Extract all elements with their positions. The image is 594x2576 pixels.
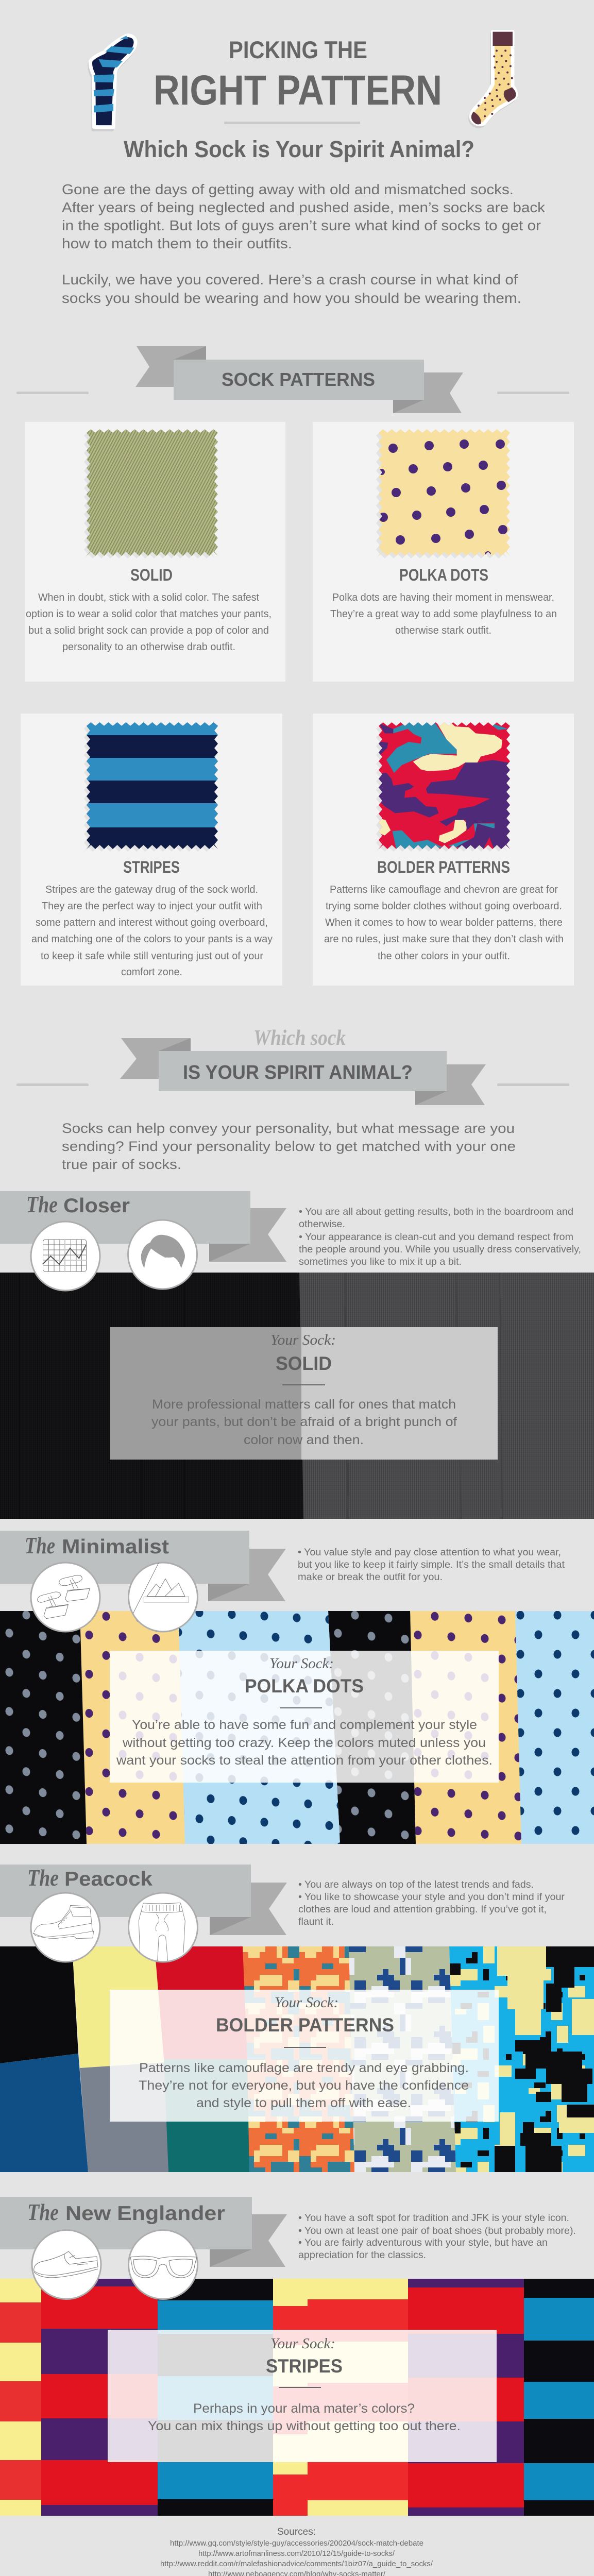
icon: glasses <box>129 2230 198 2299</box>
icon: pocket square <box>129 1563 198 1632</box>
overlay card: bolder patterns: Your Sock: <box>275 1994 338 2011</box>
panel: bolder patterns: trying some bolder clothes without going overboard. <box>326 901 562 912</box>
overlay card: solid <box>110 1327 498 1460</box>
ribbon <box>0 1865 287 1935</box>
intro text <box>62 181 546 306</box>
traits list: • You are all about getting results, both in the boardroom and <box>299 1207 573 1217</box>
panel: bolder patterns: the other colors in your outfit. <box>378 951 510 962</box>
subtitle: Which Sock is Your Spirit Animal? <box>124 136 474 162</box>
traits list: • You like to showcase your style and you don’t mind if your <box>298 1892 565 1903</box>
overlay card: polka dots <box>110 1651 499 1783</box>
sources: http://www.artofmanliness.com/2010/12/15/guide-to-socks/ <box>198 2549 395 2558</box>
sources: http://www.gq.com/style/style-guy/accessories/200204/sock-match-debate <box>170 2539 423 2548</box>
spirit animal intro text: sending? Find your personality below to get matched with your one <box>62 1139 516 1154</box>
panel: stripes <box>21 714 282 986</box>
overlay card: stripes: Your Sock: <box>270 2335 335 2352</box>
overlay card: polka dots: want your socks to steal the attention from your other clothes. <box>116 1753 493 1768</box>
panel: bolder patterns: are no rules, just make sure that they don’t clash with <box>324 934 564 945</box>
traits list: • You are always on top of the latest trends and fads. <box>298 1879 534 1890</box>
overlay card: solid: SOLID <box>276 1353 332 1374</box>
traits list: flaunt it. <box>298 1917 334 1927</box>
overlay card: bolder patterns <box>110 1990 499 2122</box>
ribbon heading: is your spirit animal: Which sock <box>253 1026 346 1050</box>
panel: bolder patterns: When it comes to how to wear bolder patterns, there <box>325 917 563 928</box>
ribbon: Minimalist <box>62 1536 169 1558</box>
overlay card: stripes: Perhaps in your alma mater’s colors? <box>193 2401 415 2416</box>
panel: solid: option is to wear a solid color that matches your pants, <box>26 608 271 620</box>
panel: stripes: Stripes are the gateway drug of the sock world. <box>45 884 258 895</box>
icon: boot <box>31 1893 100 1962</box>
traits list: • You value style and pay close attention to what you wear, <box>298 1547 561 1558</box>
ribbon heading: is your spirit animal: IS YOUR SPIRIT ANIMAL? <box>183 1062 413 1083</box>
overlay card: polka dots: You’re able to have some fun and complement your style <box>132 1718 477 1732</box>
overlay card: bolder patterns: They’re not for everyone, but you have the confidence <box>139 2078 469 2093</box>
traits list <box>298 1879 565 1927</box>
panel: solid <box>25 422 285 682</box>
ribbon: The <box>27 2199 59 2225</box>
ribbon: The <box>26 1191 58 1217</box>
panel: stripes: STRIPES <box>123 858 180 876</box>
panel: solid: When in doubt, stick with a solid color. The safest <box>38 592 259 603</box>
photo: solid socks <box>0 1273 594 1519</box>
traits list: sometimes you like to mix it up a bit. <box>299 1257 462 1267</box>
sources: http://www.reddit.com/r/malefashionadvice/comments/1biz07/a_guide_to_socks/ <box>160 2560 433 2568</box>
panel: polka dots: They’re a great way to add some playfulness to an <box>330 608 557 620</box>
ribbon: The <box>25 1532 55 1558</box>
traits list: make or break the outfit for you. <box>298 1572 443 1583</box>
overlay card: bolder patterns: and style to pull them off with ease. <box>196 2096 411 2110</box>
panel: stripes: some pattern and interest without going overboard, <box>36 917 268 928</box>
overlay card: solid: Your Sock: <box>270 1332 336 1348</box>
spirit animal intro text: true pair of socks. <box>62 1157 181 1172</box>
panel: stripes: and matching one of the colors to your pants is a way <box>31 934 273 945</box>
panel: polka dots: Polka dots are having their moment in menswear. <box>332 592 554 603</box>
section: the peacock <box>0 1865 565 2122</box>
panel: polka dots: otherwise stark outfit. <box>395 625 491 636</box>
ribbon: New Englander <box>65 2202 225 2225</box>
panel: solid: but a solid bright sock can provide a pop of color and <box>28 625 269 636</box>
traits list: • Your appearance is clean-cut and you demand respect from <box>299 1232 573 1243</box>
panel: bolder patterns <box>313 714 574 986</box>
traits list <box>298 1547 565 1583</box>
header <box>89 32 516 162</box>
traits list: otherwise. <box>299 1219 345 1230</box>
icon: cufflinks <box>31 1563 100 1632</box>
traits list: • You own at least one pair of boat shoes (but probably more). <box>298 2226 576 2236</box>
intro text: how to match them to their outfits. <box>62 235 292 251</box>
panel: bolder patterns: Patterns like camouflage and chevron are great for <box>330 884 558 895</box>
traits list: • You are fairly adventurous with your style, but have an <box>298 2238 548 2248</box>
traits list <box>298 2213 576 2261</box>
swatch: polka dots <box>376 429 511 558</box>
panel: stripes: to keep it safe while still venturing just out of your <box>41 951 263 962</box>
traits list: appreciation for the classics. <box>298 2250 426 2261</box>
swatch: stripes <box>84 722 218 852</box>
icon: boat shoe <box>32 2230 101 2299</box>
section: the closer <box>0 1191 581 1460</box>
ribbon heading: is your spirit animal <box>16 1026 569 1105</box>
overlay card: polka dots: without getting too crazy. Keep the colors muted unless you <box>122 1736 486 1750</box>
panel: stripes: They are the perfect way to inject your outfit with <box>42 901 262 912</box>
title line one: PICKING THE <box>229 36 367 63</box>
section: the minimalist <box>0 1531 565 1783</box>
panel: polka dots <box>313 422 574 682</box>
ribbon heading: sock patterns <box>16 346 569 413</box>
icon: polka dot sock <box>470 32 516 126</box>
intro text: in the spotlight. But lots of guys aren’t sure what kind of socks to get or <box>62 217 541 233</box>
traits list: clothes are loud and attention grabbing. If you’ve got it, <box>298 1904 547 1915</box>
ribbon <box>0 2197 287 2267</box>
overlay card: solid: your pants, but don’t be afraid of a bright punch of <box>151 1415 457 1429</box>
overlay card: stripes: You can mix things up without getting too out there. <box>148 2419 461 2433</box>
traits list <box>299 1207 581 1267</box>
overlay card: polka dots: POLKA DOTS <box>245 1675 364 1697</box>
traits list: • You have a soft spot for tradition and JFK is your style icon. <box>298 2213 569 2224</box>
photo: striped socks <box>0 2279 594 2516</box>
photo: polka dot socks <box>0 1611 594 1844</box>
icon: pants <box>129 1893 198 1962</box>
overlay card: polka dots: Your Sock: <box>269 1655 334 1672</box>
intro text: socks you should be wearing and how you should be wearing them. <box>62 290 521 306</box>
section: the new englander <box>0 2197 576 2462</box>
swatch: camouflage <box>376 719 512 853</box>
ribbon <box>0 1531 286 1601</box>
swatch: solid <box>84 429 218 558</box>
traits list: the people around you. While you usually dress conservatively, <box>299 1244 581 1255</box>
overlay card: solid: More professional matters call for ones that match <box>152 1397 456 1412</box>
sources <box>147 2527 446 2576</box>
intro text: After years of being neglected and pushed aside, men’s socks are back <box>62 199 546 215</box>
overlay card: solid: color now and then. <box>244 1433 364 1447</box>
intro text: Gone are the days of getting away with old and mismatched socks. <box>62 181 514 197</box>
overlay card: bolder patterns: BOLDER PATTERNS <box>216 2014 394 2036</box>
panel: solid: SOLID <box>130 566 173 584</box>
ribbon <box>0 1191 286 1262</box>
spirit animal intro text: Socks can help convey your personality, but what message are you <box>62 1121 515 1136</box>
ribbon: Closer <box>63 1195 130 1217</box>
ribbon: Peacock <box>64 1868 152 1890</box>
overlay card: stripes <box>108 2330 497 2462</box>
panel: bolder patterns: BOLDER PATTERNS <box>377 858 510 876</box>
icon: striped blue sock <box>89 35 135 130</box>
traits list: but you like to keep it fairly simple. It’s the small details that <box>298 1560 565 1570</box>
overlay card: stripes: STRIPES <box>266 2355 343 2377</box>
spirit animal intro text <box>62 1121 516 1172</box>
icon: chart <box>31 1222 100 1291</box>
icon: hair <box>128 1220 197 1289</box>
panel: polka dots: POLKA DOTS <box>399 566 488 584</box>
sources: Sources: <box>277 2527 316 2537</box>
panel: stripes: comfort zone. <box>121 967 182 978</box>
panel: solid: personality to an otherwise drab outfit. <box>62 641 235 653</box>
overlay card: bolder patterns: Patterns like camouflage are trendy and eye grabbing. <box>139 2061 469 2075</box>
photo: bolder pattern socks <box>0 1946 594 2172</box>
ribbon heading: sock patterns: SOCK PATTERNS <box>222 369 375 390</box>
intro text: Luckily, we have you covered. Here’s a crash course in what kind of <box>62 272 518 287</box>
title line two: RIGHT PATTERN <box>154 67 442 114</box>
ribbon: The <box>27 1865 59 1891</box>
